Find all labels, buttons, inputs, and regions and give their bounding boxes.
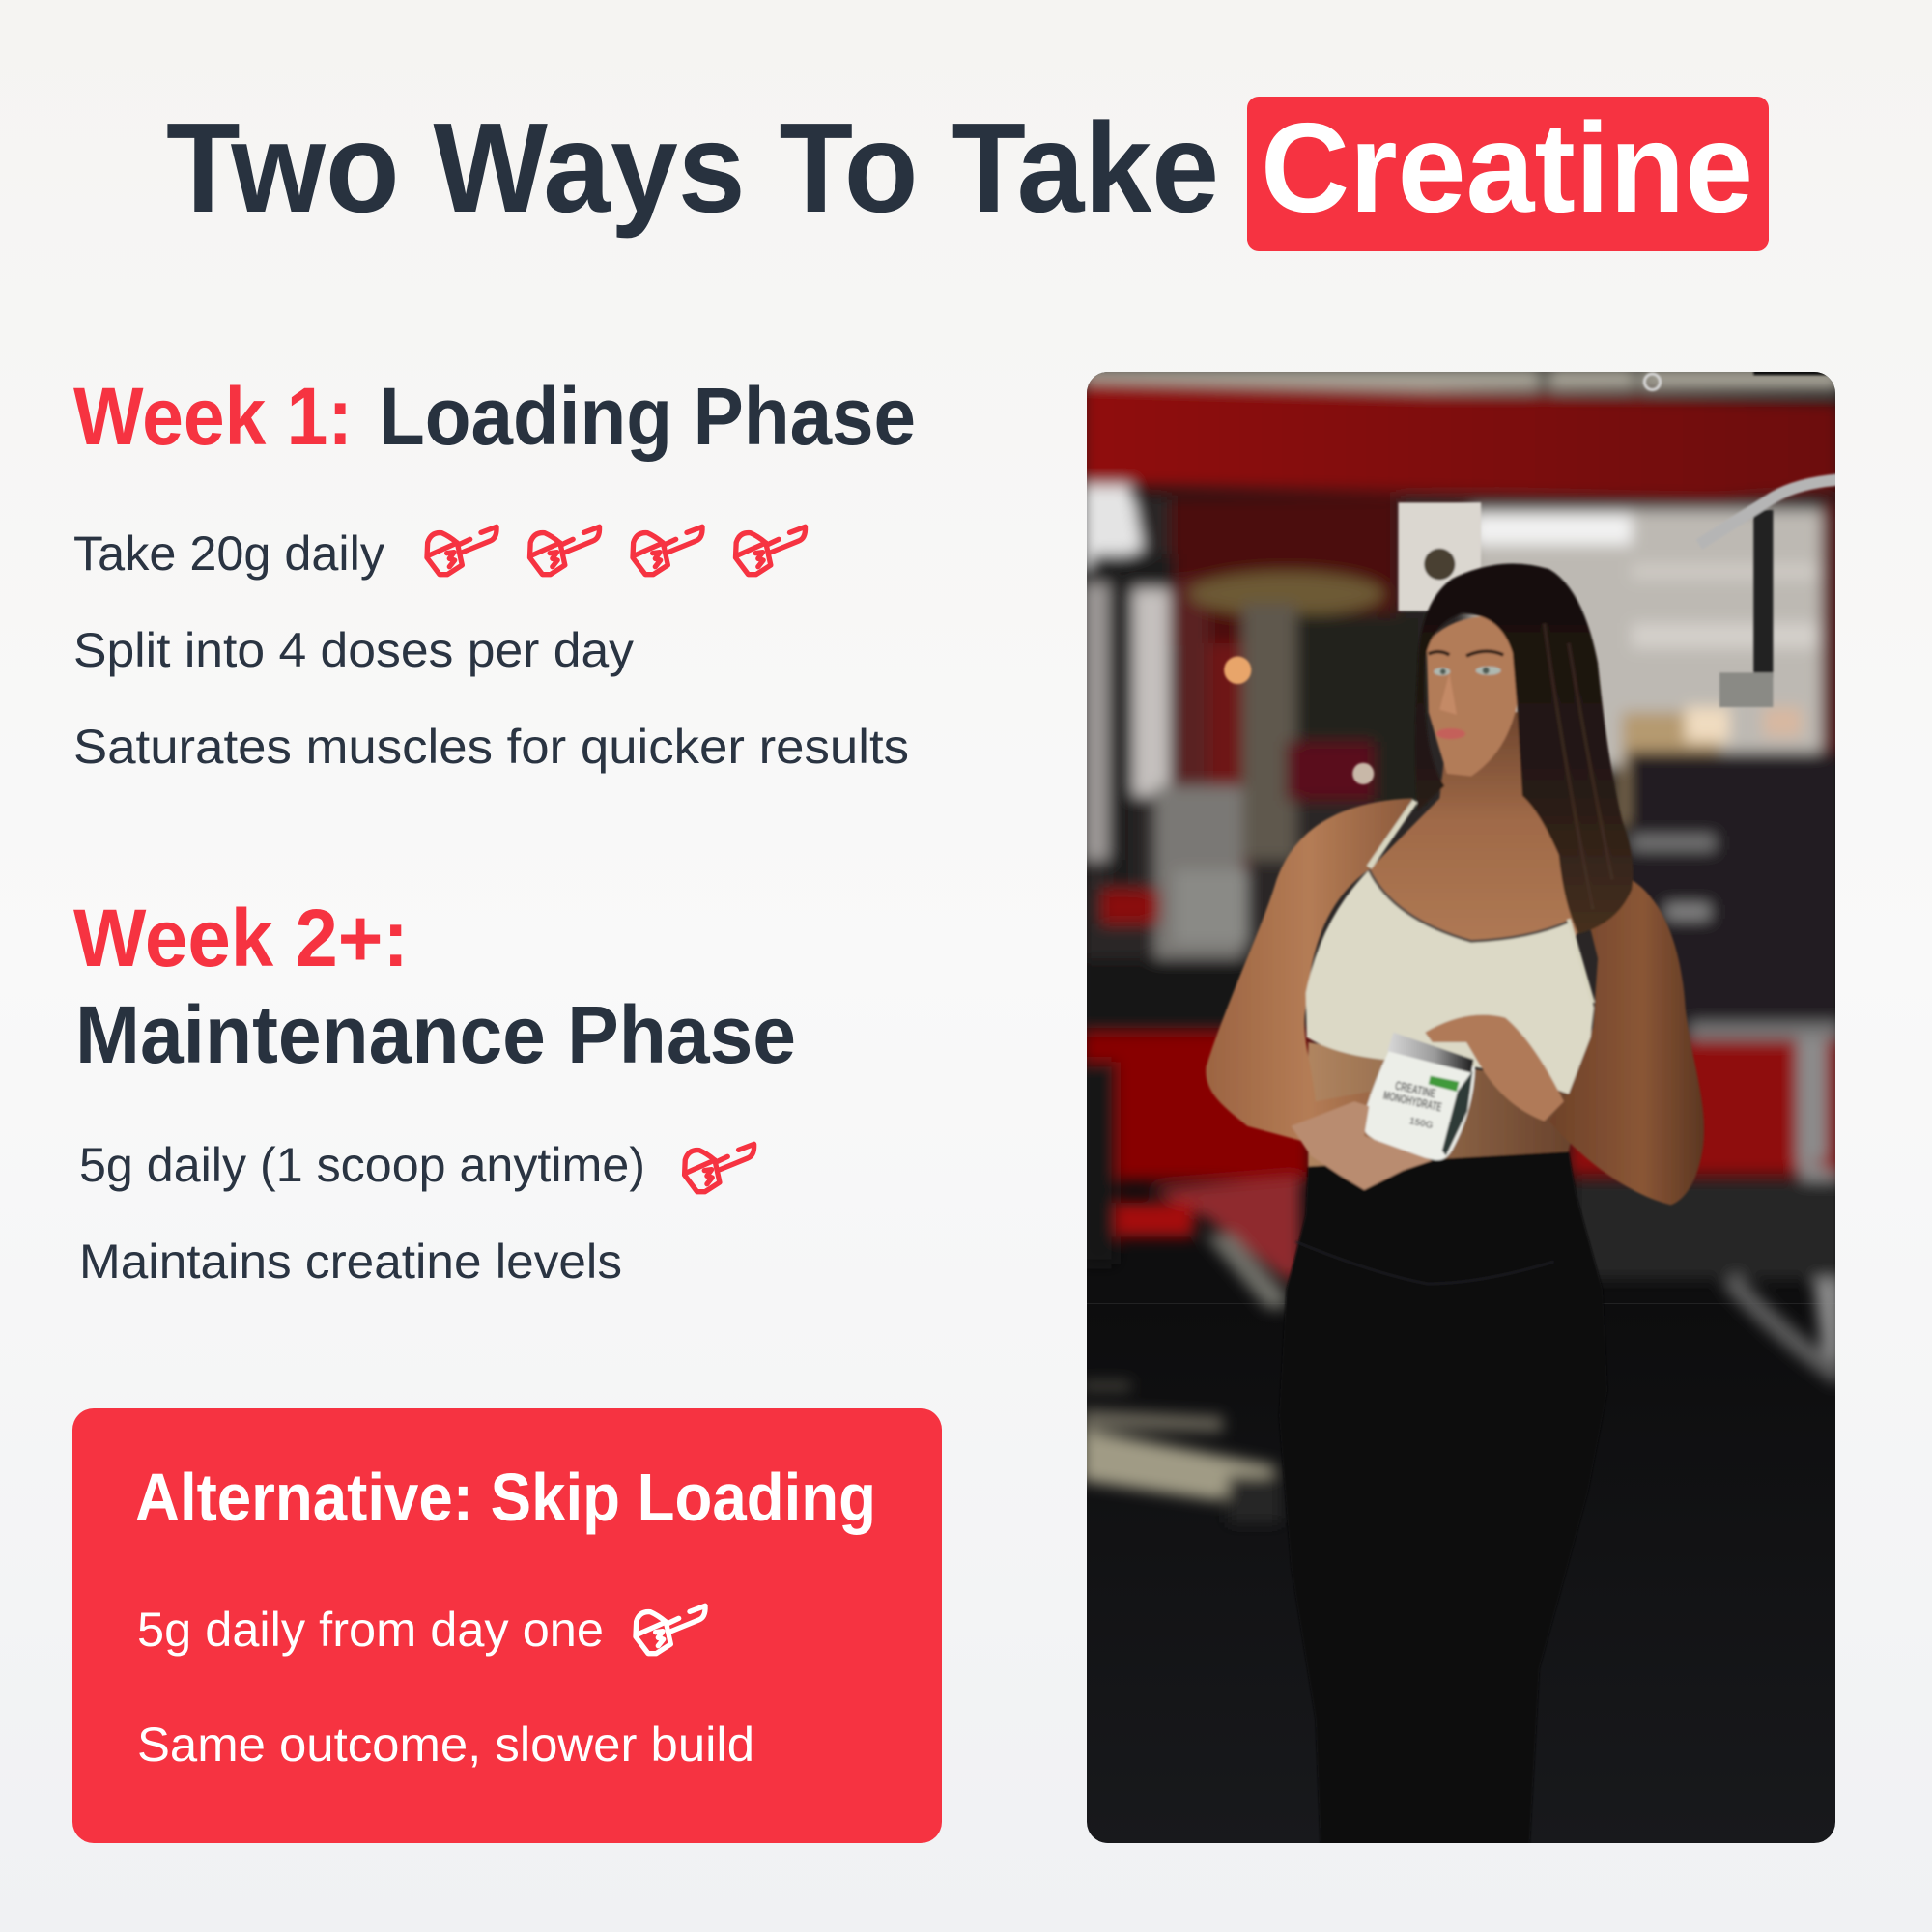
gym background	[1082, 367, 1841, 1522]
icons: four scoops	[427, 526, 806, 575]
text: take 20g daily: Take 20g daily	[73, 526, 384, 581]
title	[166, 97, 1769, 251]
leggings	[1279, 1151, 1607, 1846]
icon: white scoop	[636, 1605, 705, 1654]
heading: week 1: Loading Phase	[379, 371, 916, 462]
text: 5g daily: 5g daily (1 scoop anytime)	[79, 1138, 645, 1192]
jar of creatine: MONOHYDRATE	[1382, 1089, 1443, 1115]
section: week 1 loading phase	[73, 371, 916, 774]
text: saturates muscles: Saturates muscles for quicker results	[73, 720, 909, 774]
text: split doses: Split into 4 doses per day	[73, 623, 634, 677]
heading: maintenance phase: Maintenance Phase	[75, 989, 796, 1080]
text: maintains levels: Maintains creatine levels	[79, 1235, 622, 1289]
jar of creatine: CREATINE	[1394, 1079, 1437, 1100]
hands	[1425, 1015, 1564, 1122]
icon: scoop	[685, 1144, 754, 1192]
photo: woman holding creatine jar in gym	[1082, 367, 1841, 1846]
hair	[1415, 563, 1634, 934]
face	[1427, 616, 1520, 776]
gym details	[1224, 367, 1841, 784]
sports bra	[1306, 869, 1594, 1094]
right arm	[1549, 875, 1704, 1205]
jar of creatine: 150G	[1408, 1116, 1434, 1131]
panel: alternative skip loading	[72, 1408, 942, 1843]
left arm	[1206, 798, 1413, 1151]
neck and chest	[1369, 711, 1579, 941]
person	[1206, 563, 1704, 1846]
jar of creatine	[1363, 1033, 1475, 1160]
panel text: same outcome: Same outcome, slower build	[137, 1718, 754, 1772]
title: Two Ways To Take	[166, 97, 1219, 239]
panel text: 5g daily from day one: 5g daily from day one	[137, 1603, 604, 1657]
section: week 2 maintenance phase	[73, 893, 796, 1289]
panel heading: Alternative: Skip Loading	[135, 1460, 876, 1535]
title highlight: Creatine: Creatine	[1261, 97, 1753, 239]
heading: week 2+: Week 2+:	[73, 893, 409, 983]
midriff	[1308, 1042, 1583, 1167]
heading: week 1: Week 1:	[73, 371, 353, 462]
